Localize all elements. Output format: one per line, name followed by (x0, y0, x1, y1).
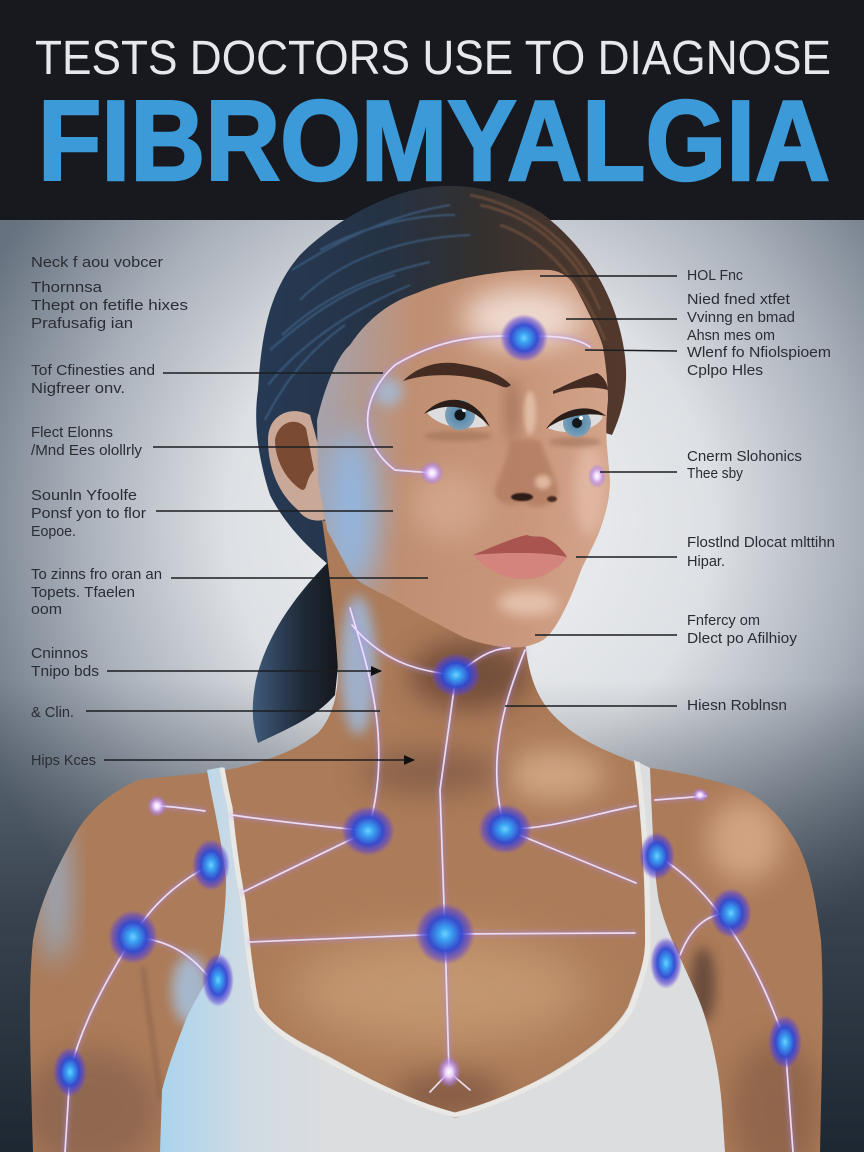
body shading (20, 595, 820, 1152)
face shading (326, 288, 606, 616)
ponytail (253, 555, 345, 743)
node: left collar (341, 806, 395, 856)
node: left shoulder (192, 839, 230, 891)
right labels: Cnerm Slohonics (687, 449, 802, 465)
node: right shoulder tip (692, 788, 708, 802)
left arm inner crease (143, 967, 160, 1100)
right labels: Wlenf fo Nfiolspioem (687, 345, 831, 361)
right labels (687, 268, 835, 714)
node: left forearm (53, 1047, 87, 1097)
left labels: Ponsf yon to flor (31, 506, 146, 522)
right labels: Flostlnd Dlocat mlttihn (687, 535, 835, 551)
node: forehead (500, 314, 548, 362)
node: throat (431, 653, 481, 697)
bright lines (65, 336, 793, 1152)
glowing tender point nodes (53, 314, 802, 1097)
right labels: HOL Fnc (687, 268, 743, 284)
right eyebrow (553, 373, 608, 394)
right labels: Thee sby (687, 466, 744, 482)
node: lower sternum (437, 1056, 461, 1088)
right eye (546, 408, 606, 437)
face (317, 270, 610, 648)
glow halo (65, 336, 793, 1152)
left labels: Prafusafig ian (31, 316, 133, 332)
left labels: /Mnd Ees olollrly (31, 443, 143, 459)
leader lines (86, 276, 677, 760)
node: right shoulder (639, 832, 675, 880)
illustration: woman portrait (20, 186, 823, 1152)
hair (256, 186, 626, 570)
panel: title band (0, 0, 864, 220)
node: right upper arm (710, 888, 752, 938)
left labels: Eopoe. (31, 524, 76, 540)
left labels: Tof Cfinesties and (31, 363, 155, 379)
node: cheek left (420, 461, 444, 485)
left labels: Topets. Tfaelen (31, 585, 135, 601)
left labels: Hips Kces (31, 753, 96, 769)
node: left shoulder tip (147, 795, 167, 817)
nose (495, 440, 558, 506)
node: right collar (478, 804, 532, 854)
lips (473, 535, 567, 579)
glowing nerve lines (65, 336, 793, 1152)
left labels: Thept on fetifle hixes (31, 298, 188, 314)
left labels: oom (31, 602, 62, 618)
right labels: Ahsn mes om (687, 328, 775, 344)
node: left upper arm (108, 910, 158, 964)
right labels: Hipar. (687, 554, 725, 570)
tank top (160, 760, 725, 1152)
right labels: Fnfercy om (687, 613, 760, 629)
right labels: Hiesn Roblnsn (687, 698, 787, 714)
node: left chest (202, 953, 234, 1007)
left labels: Flect Elonns (31, 425, 113, 441)
left eyebrow (403, 363, 511, 387)
ear (268, 411, 333, 521)
left labels: Cninnos (31, 646, 88, 662)
tank top neckline trim (222, 762, 648, 1115)
left labels (31, 255, 188, 769)
right labels: Vvinng en bmad (687, 310, 795, 326)
left labels: Sounln Yfoolfe (31, 488, 137, 504)
left labels: Neck f aou vobcer (31, 255, 163, 271)
node: cheek right (588, 464, 606, 488)
node: right forearm (768, 1015, 802, 1069)
left labels: Thornnsa (31, 280, 103, 296)
right labels: Dlect po Afilhioy (687, 631, 798, 647)
left labels: Tnipo bds (31, 664, 99, 680)
left labels: To zinns fro oran an (31, 567, 162, 583)
left labels: Nigfreer onv. (31, 381, 125, 397)
node: sternum (415, 903, 475, 965)
left eye (424, 400, 490, 430)
body and shoulders (30, 520, 823, 1152)
right labels: Cplpo Hles (687, 363, 763, 379)
left labels: & Clin. (31, 705, 74, 721)
right labels: Nied fned xtfet (687, 292, 790, 308)
node: right chest (650, 937, 682, 989)
